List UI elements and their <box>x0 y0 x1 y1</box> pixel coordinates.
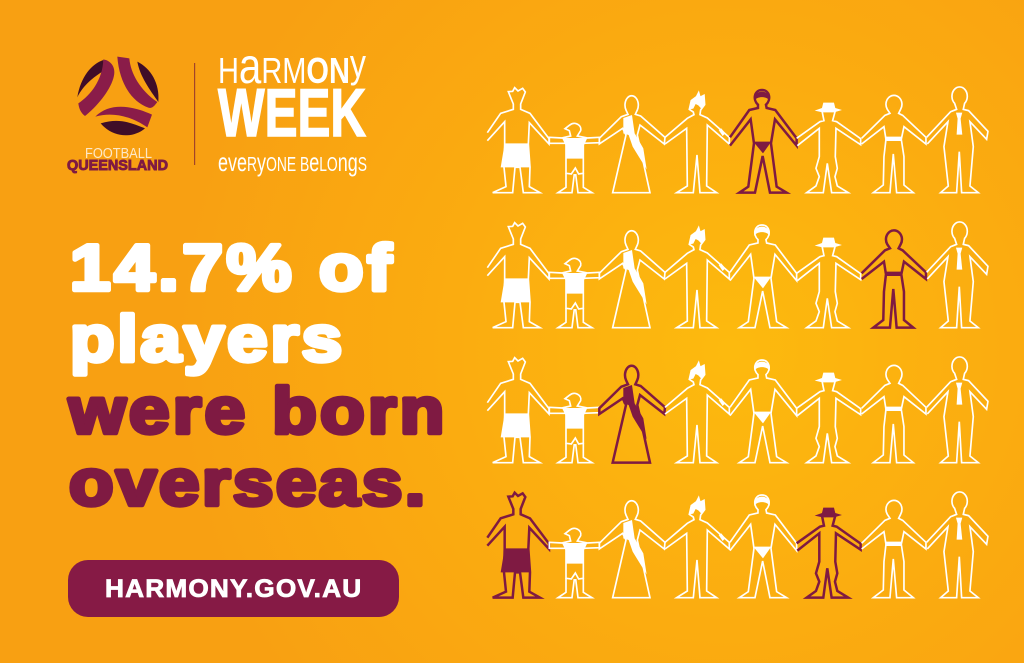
logo text: Harmony: HaRMON <box>218 38 360 94</box>
icon: football emblem <box>77 57 159 135</box>
button: harmony.gov.au: HARMONY.GOV.AU <box>105 576 361 603</box>
headline line: 14.7% of: 14.7% of <box>70 232 393 304</box>
logo: Football Queensland <box>67 57 168 174</box>
logo text: Harmony: y <box>350 42 366 86</box>
logo text: QUEENSLAND: QUEENSLAND <box>67 158 168 174</box>
row 2 of people: seventh figure highlighted <box>487 222 988 328</box>
headline line: overseas.: overseas. <box>69 447 425 519</box>
button: harmony.gov.au <box>68 560 399 617</box>
headline <box>68 232 444 519</box>
logo: Harmony Week <box>218 38 367 177</box>
row 3 of people: third figure highlighted <box>487 357 988 463</box>
row 4 of people: first and sixth figures highlighted <box>487 492 988 598</box>
row 1 of people: fifth figure highlighted <box>487 87 988 193</box>
headline line: were born: were born <box>68 375 444 447</box>
headline line: players: players <box>70 303 342 375</box>
logo text: Everyone Belongs: eveRyONE BeLOngS <box>218 147 367 177</box>
logo text: Week: WEEK <box>218 75 366 151</box>
divider <box>194 63 195 165</box>
logo text: FOOTBALL: FOOTBALL <box>85 146 152 162</box>
